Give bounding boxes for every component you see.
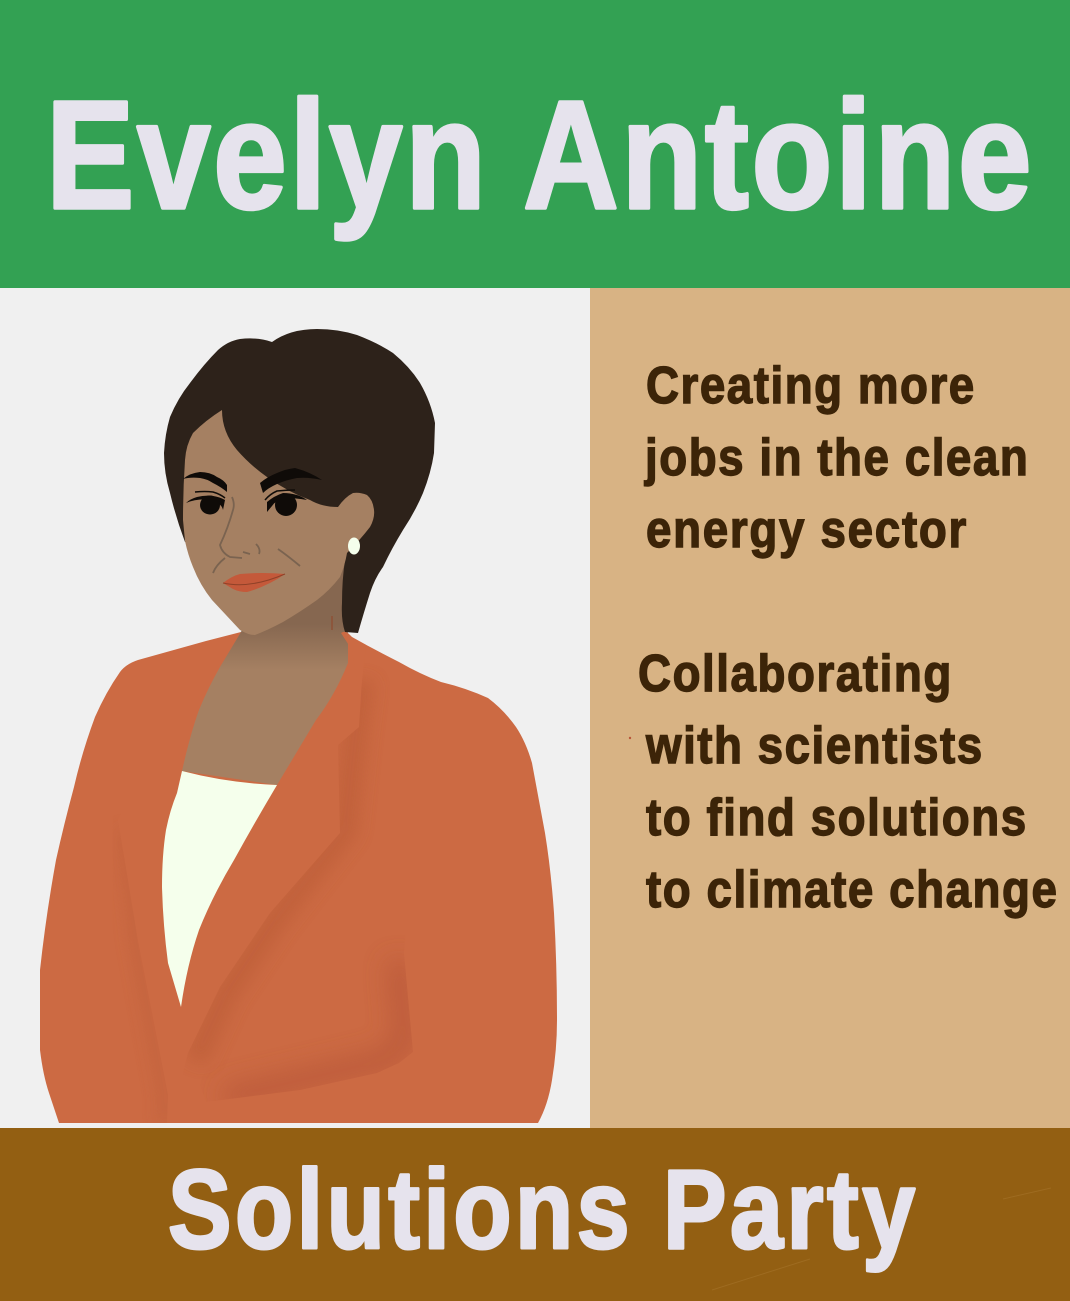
title: Evelyn Antoine xyxy=(46,70,1032,241)
text block: climate collaboration: with scientists xyxy=(645,717,982,775)
face xyxy=(183,410,374,635)
jacket xyxy=(40,632,557,1123)
panel: portrait background xyxy=(0,288,590,1128)
text block: clean energy jobs: energy sector xyxy=(646,501,966,559)
text block: clean energy jobs xyxy=(644,357,1028,559)
panel: footer band xyxy=(0,1128,1070,1301)
party name: Solutions Party xyxy=(168,1148,915,1273)
neck xyxy=(182,555,348,785)
panel: header band xyxy=(0,0,1070,288)
text block: climate collaboration: to find solutions xyxy=(646,789,1026,847)
text block: clean energy jobs: Creating more xyxy=(646,357,974,415)
panel: platform background xyxy=(590,288,1070,1128)
hair xyxy=(164,329,435,633)
nose and smile lines xyxy=(213,497,300,573)
text block: climate collaboration xyxy=(638,645,1057,919)
shirt xyxy=(162,771,277,1007)
eyes xyxy=(186,490,307,516)
eyebrows xyxy=(183,468,322,493)
text block: climate collaboration: Collaborating xyxy=(638,645,951,703)
neck crease xyxy=(331,616,333,630)
collar tip xyxy=(341,632,366,700)
lips xyxy=(223,573,285,592)
illustration: candidate portrait xyxy=(40,329,557,1123)
text block: climate collaboration: to climate change xyxy=(646,861,1057,919)
earring xyxy=(348,538,360,554)
text block: clean energy jobs: jobs in the clean xyxy=(644,429,1028,487)
